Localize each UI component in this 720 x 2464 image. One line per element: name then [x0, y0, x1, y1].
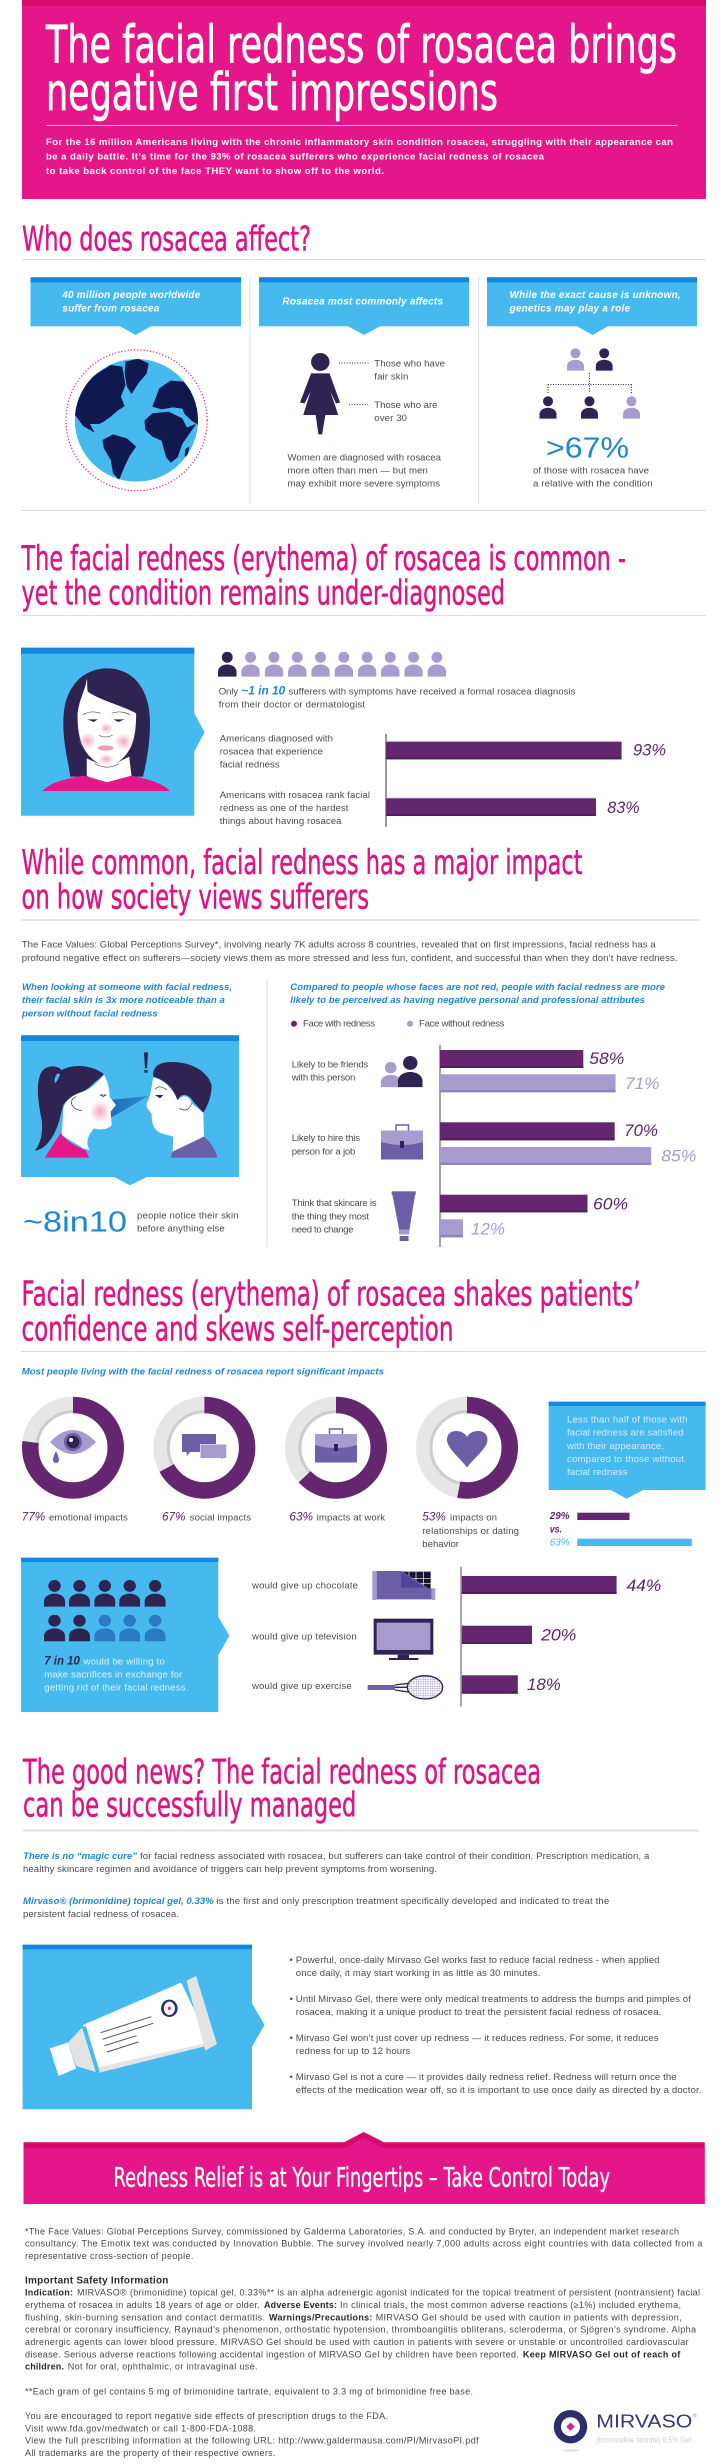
- group: hire: Likely to hire this: [292, 1133, 360, 1144]
- important safety information: Warnings/Precautions:: [269, 2312, 372, 2322]
- woman labels: Those who have: [374, 359, 445, 370]
- panel: 7 in 10: 7 in 10: [44, 1655, 80, 1667]
- text: 1 in 10 diagnosis: [219, 683, 576, 710]
- donut: 53% relationships: impacts on: [450, 1513, 497, 1524]
- bullet list: benefits: [290, 1955, 702, 2096]
- group: skincare: Think that skincare is: [292, 1198, 377, 1209]
- banner: call to action: [24, 2132, 705, 2204]
- important safety information: Keep MIRVASO Gel out of reach of: [523, 2349, 681, 2359]
- panel: genetics: of those with rosacea have: [533, 466, 649, 477]
- group: skincare: 12%: [471, 1221, 505, 1239]
- row: exercise: [251, 1675, 561, 1699]
- important safety information: MIRVASO Gel should be used with caution in patients with depression,: [376, 2312, 682, 2322]
- mini bars: 29% vs 63%: vs.: [550, 1524, 562, 1535]
- icon: television: [374, 1619, 433, 1660]
- footnote: survey: *The Face Values: Global Perceptions Survey, commissioned by Galderma Laboratories, S.A. and conducted by Bryter, an independent market research: [25, 2226, 679, 2236]
- row: exercise: would give up exercise: [251, 1681, 352, 1692]
- bullet list: benefits: effects of the medication wear off, so it is important to use once daily as directed by a doctor.: [296, 2085, 702, 2096]
- logo: Mirvaso: [554, 2410, 697, 2452]
- donut: 53% relationships: relationships or dating: [422, 1526, 519, 1537]
- important safety information: adrenergic agents can lower blood pressure. MIRVASO Gel should be used with caution in patients with severe or unstable or uncontrolled cardiovascular: [25, 2337, 689, 2347]
- heading: confidence: [21, 1275, 706, 1352]
- important safety information: erythema of rosacea in adults 18 years of age or older.: [25, 2300, 260, 2310]
- bullet list: benefits: redness for up to 12 hours: [296, 2046, 411, 2057]
- dotted leaders: [339, 363, 368, 405]
- icon: briefcase: [381, 1125, 423, 1160]
- row: chocolate: [251, 1571, 661, 1600]
- bullet list: benefits: •: [290, 2033, 293, 2044]
- main title: negative first impressions: [46, 63, 498, 123]
- text: no magic cure: for facial redness associated with rosacea, but sufferers can take control of their condition. Prescription medication, a: [140, 1851, 650, 1862]
- panel: genetics: genetics may play a role: [508, 303, 630, 314]
- panel: face illustration: [21, 648, 204, 816]
- important safety information: **Each gram of gel contains 5 mg of brimonidine tartrate, equivalent to 3.3 mg of brimonidine free base.: [25, 2386, 473, 2396]
- donut: 77% emotional: emotional impacts: [49, 1513, 128, 1524]
- woman labels: [288, 359, 445, 490]
- stat: 8 in 10: ~8in10: [23, 1207, 127, 1239]
- panel: satisfaction: Less than half of those with: [567, 1415, 688, 1426]
- heading: who does rosacea affect: Who does rosacea affect?: [22, 220, 311, 260]
- icon: tube: [392, 1191, 416, 1241]
- panel: 40 million worldwide: 40 million people worldwide: [61, 290, 201, 301]
- panel: 40 million worldwide: suffer from rosacea: [62, 303, 160, 314]
- important safety information: Not for oral, ophthalmic, or intravaginal use.: [68, 2362, 258, 2372]
- important safety information: flushing, skin-burning sensation and contact dermatitis.: [25, 2312, 265, 2322]
- bar: 83%: Americans with rosacea rank facial: [220, 790, 370, 801]
- bullet list: benefits: •: [290, 1994, 293, 2005]
- group: skincare: the thing they most: [292, 1211, 369, 1222]
- panel: satisfaction: with their appearance,: [566, 1441, 664, 1452]
- dotted ring: [66, 350, 207, 491]
- woman labels: over 30: [374, 413, 407, 424]
- icon: two people: [381, 1056, 422, 1087]
- text: negative attributes: [290, 982, 666, 1006]
- donut: 63% work: [289, 1405, 385, 1524]
- bar: 93%: 93%: [633, 742, 666, 760]
- heading: the good news: [22, 1752, 699, 1832]
- bar: 83%: things about having rosacea: [220, 816, 342, 827]
- icon: tearful eye: [50, 1430, 96, 1463]
- mini bars: 29% vs 63%: 29%: [549, 1511, 570, 1522]
- icon: woman figure: [300, 353, 340, 434]
- header banner: [22, 0, 706, 199]
- footer: reporting and links: [25, 2411, 479, 2458]
- important safety information: Indication:: [25, 2288, 73, 2298]
- panel: genetics: [487, 277, 697, 490]
- group: skincare: 60%: [593, 1195, 628, 1213]
- text: Mirvaso indication: is the first and only prescription treatment specifically developed and indicated to treat the: [216, 1896, 609, 1907]
- bullet list: benefits: Mirvaso Gel is not a cure — it provides daily redness relief. Redness will return once the: [296, 2072, 677, 2083]
- group: hire: 70%: [624, 1122, 658, 1140]
- panel: 40 million worldwide: [30, 277, 241, 491]
- row: chocolate: would give up chocolate: [251, 1580, 358, 1591]
- bar: 93%: rosacea that experience: [220, 747, 323, 758]
- text: survey description: The Face Values: Global Perceptions Survey*, involving nearly 7K adults across 8 countries, revealed that on first impressions, facial redness has a: [22, 940, 656, 951]
- important safety information: Important Safety Information: [25, 2275, 168, 2286]
- legend: Face with redness: [303, 1019, 375, 1030]
- bar: 83%: redness as one of the hardest: [220, 803, 349, 814]
- bar chart: sacrifices: [251, 1567, 661, 1707]
- panel: genetics: While the exact cause is unknown,: [510, 290, 681, 301]
- icon: briefcase: [315, 1429, 357, 1462]
- donut: 63% work: 63%: [289, 1512, 313, 1524]
- bar chart: diagnosed and hardest: [220, 734, 666, 827]
- text: survey description: [22, 940, 677, 964]
- stat: >67%: >67%: [546, 432, 629, 464]
- donut: 53% relationships: 53%: [422, 1512, 446, 1524]
- stat: 8 in 10: before anything else: [137, 1224, 225, 1235]
- bar: 93%: facial redness: [220, 760, 280, 771]
- donut: 67% social: 67%: [162, 1512, 186, 1524]
- icon: woman and man profiles: [35, 1052, 217, 1158]
- important safety information: cerebral or coronary insufficiency, Raynaud’s phenomenon, orthostatic hypotension, thromboangiitis obliterans, scleroderma, or Sjögren’s syndrome. Alpha: [25, 2325, 696, 2335]
- row: exercise: 18%: [527, 1676, 561, 1694]
- text: Mirvaso indication: persistent facial redness of rosacea.: [23, 1909, 179, 1920]
- icon: tennis racket: [368, 1676, 443, 1699]
- panel: 7 in 10: [21, 1558, 229, 1712]
- important safety information: [25, 2275, 700, 2396]
- row: television: [251, 1619, 576, 1660]
- heading: major impact: [21, 843, 700, 921]
- text: no magic cure: There is no “magic cure”: [23, 1851, 137, 1862]
- bullet list: benefits: Powerful, once-daily Mirvaso Gel works fast to reduce facial redness - when applied: [296, 1955, 660, 1966]
- icon: heart: [447, 1431, 488, 1468]
- icon: family tree: [540, 348, 640, 419]
- icon grid: people: [44, 1580, 166, 1641]
- subheading: significant impacts: Most people living with the facial redness of rosacea report significant impacts: [22, 1366, 384, 1377]
- footnote: survey: representative cross-section of people.: [25, 2251, 193, 2261]
- important safety information: children.: [25, 2362, 64, 2372]
- group: friends: 71%: [625, 1075, 660, 1093]
- footnote: survey: [25, 2226, 702, 2261]
- woman labels: more often than men — but men: [288, 466, 428, 477]
- group: friends: [291, 1050, 660, 1093]
- intro text: For the 16 million Americans living with the chronic inflammatory skin condition rosacea, struggling with their appearance can: [46, 137, 673, 148]
- heading: major impact: on how society views sufferers: [22, 878, 369, 918]
- icon row: 1 in 10 people: [218, 652, 446, 677]
- donut: 67% social: social impacts: [190, 1513, 251, 1524]
- bar: 83%: 83%: [607, 799, 640, 817]
- bullet list: benefits: Until Mirvaso Gel, there were only medical treatments to address the bumps and pimples of: [296, 1994, 691, 2005]
- panel: 7 in 10: make sacrifices in exchange for: [44, 1669, 183, 1680]
- important safety information: MIRVASO® (brimonidine) topical gel, 0.33%** is an alpha adrenergic agonist indicated for the topical treatment of persistent (nontransient) facial: [77, 2288, 700, 2298]
- icon: tube of gel: [50, 1976, 217, 2076]
- main title: [45, 16, 677, 123]
- logo: Mirvaso: MIRVASO: [596, 2411, 692, 2432]
- text: no magic cure: healthy skincare regimen and avoidance of triggers can help prevent symptoms from worsening.: [23, 1864, 437, 1875]
- woman labels: may exhibit more severe symptoms: [288, 479, 440, 490]
- intro text: be a daily battle. It’s time for the 93% of rosacea sufferers who experience facial redness of rosacea: [46, 152, 545, 162]
- group: friends: Likely to be friends: [292, 1059, 369, 1070]
- text: negative attributes: Compared to people whose faces are not red, people with facial redness are more: [290, 982, 666, 993]
- woman labels: Those who are: [374, 400, 438, 411]
- text: Mirvaso indication: [23, 1896, 609, 1920]
- row: chocolate: 44%: [627, 1577, 661, 1595]
- text: survey description: profound negative effect on sufferers—society views them as more stressed and less fun, confident, and successful than when they don’t have redness.: [22, 953, 677, 964]
- row: television: 20%: [540, 1626, 576, 1644]
- panel: satisfaction: compared to those without: [567, 1454, 684, 1465]
- text: 3x more noticeable: [21, 982, 232, 1019]
- bullet list: benefits: •: [290, 1955, 293, 1966]
- bar: 83%: [220, 790, 640, 827]
- icon: chocolate bar: [372, 1571, 435, 1600]
- panel: satisfaction: facial redness: [567, 1467, 628, 1478]
- text: 3x more noticeable: When looking at someone with facial redness,: [22, 982, 232, 993]
- logo: Mirvaso: ®: [693, 2412, 697, 2420]
- panel: most commonly affects: Rosacea most commonly affects: [282, 297, 443, 308]
- stat: 8 in 10: people notice their skin: [137, 1211, 239, 1222]
- panel: genetics: a relative with the condition: [533, 479, 653, 490]
- panel: satisfaction: facial redness are satisfied: [567, 1428, 684, 1439]
- footnote: survey: consultancy. The Emotix text was conducted by Innovation Bubble. The survey involved nearly 7,000 adults across eight countries with data collected from a: [25, 2239, 702, 2249]
- bullet list: benefits: •: [290, 2072, 293, 2083]
- footer: reporting and links: You are encouraged to report negative side effects of prescription drugs to the FDA.: [25, 2411, 388, 2421]
- panel: satisfaction: [549, 1402, 706, 1548]
- group: hire: person for a job: [292, 1146, 355, 1157]
- donut: 53% relationships: behavior: [422, 1539, 460, 1550]
- donut: 77% emotional: [22, 1405, 128, 1524]
- text: 1 in 10 diagnosis: ~1 in 10: [241, 683, 286, 697]
- mini bars: 29% vs 63%: [549, 1511, 692, 1548]
- text: negative attributes: likely to be perceived as having negative personal and professional attributes: [290, 995, 645, 1006]
- panel: most commonly affects: [259, 277, 469, 490]
- text: 1 in 10 diagnosis: from their doctor or dermatologist: [219, 699, 365, 710]
- legend: Face without redness: [419, 1019, 505, 1030]
- group: hire: [292, 1122, 696, 1166]
- bullet list: benefits: once daily, it may start working in as little as 30 minutes.: [296, 1968, 540, 1979]
- group: friends: 58%: [589, 1050, 624, 1068]
- bullet list: benefits: Mirvaso Gel won’t just cover up redness — it reduces redness. For some, it reduces: [296, 2033, 659, 2044]
- important safety information: In clinical trials, the most common adverse reactions (≥1%) included erythema,: [340, 2300, 681, 2310]
- intro text: [46, 137, 673, 177]
- bar: 93%: Americans diagnosed with: [220, 734, 333, 745]
- panel: 7 in 10: would be willing to: [82, 1656, 165, 1667]
- legend: [291, 1019, 505, 1030]
- donut: 63% work: impacts at work: [317, 1513, 385, 1524]
- donut: 67% social: [162, 1405, 251, 1524]
- text: 1 in 10 diagnosis: Only: [219, 686, 238, 697]
- stat: 8 in 10: [23, 1207, 239, 1239]
- group: skincare: [292, 1191, 628, 1241]
- text: 3x more noticeable: their facial skin is 3x more noticeable than a: [22, 995, 225, 1006]
- group: friends: with this person: [291, 1072, 355, 1083]
- panel: 7 in 10: getting rid of their facial redness.: [44, 1682, 188, 1693]
- woman labels: Women are diagnosed with rosacea: [288, 453, 442, 464]
- text: Mirvaso indication: Mirvaso® (brimonidine) topical gel, 0.33%: [23, 1896, 214, 1907]
- donut: 77% emotional: 77%: [22, 1512, 45, 1524]
- intro text: to take back control of the face THEY want to show off to the world.: [46, 166, 384, 177]
- group: hire: 85%: [661, 1148, 696, 1166]
- panel: gel tube: [23, 1945, 264, 2109]
- group: skincare: need to change: [292, 1224, 354, 1235]
- bullet list: benefits: rosacea, making it a unique product to treat the persistent facial redness of rosacea.: [296, 2007, 661, 2018]
- bar: 93%: [220, 734, 666, 771]
- footer: reporting and links: Visit www.fda.gov/medwatch or call 1-800-FDA-1088.: [25, 2423, 256, 2433]
- text: 3x more noticeable: person without facial redness: [21, 1008, 158, 1019]
- bar chart: perceptions: [291, 1045, 696, 1247]
- heading: confidence: confidence and skews self-perception: [22, 1310, 454, 1350]
- mini bars: 29% vs 63%: 63%: [550, 1537, 570, 1548]
- woman labels: fair skin: [374, 372, 408, 383]
- important safety information: disease. Serious adverse reactions following accidental ingestion of MIRVASO Gel by children have been reported.: [25, 2349, 519, 2359]
- icon: speech bubbles: [182, 1434, 226, 1460]
- footer: reporting and links: All trademarks are the property of their respective owners.: [25, 2448, 276, 2458]
- donut: 53% relationships: [422, 1405, 519, 1550]
- icon: globe: [74, 359, 201, 482]
- logo: Mirvaso: (brimonidine tartrate) 0.5% Gel: [596, 2435, 691, 2444]
- row: television: would give up television: [251, 1632, 357, 1643]
- panel: two profiles illustration: [21, 1035, 239, 1185]
- text: no magic cure: [23, 1851, 650, 1875]
- footer: reporting and links: View the full prescribing information at the following URL: http://www.galdermausa.com/PI/MirvasoPI.pdf: [25, 2436, 479, 2446]
- icon: woman face: [42, 668, 170, 791]
- important safety information: Adverse Events:: [264, 2300, 337, 2310]
- heading: the good news: can be successfully managed: [23, 1786, 356, 1826]
- heading: common yet under-diagnosed: [21, 539, 706, 616]
- text: 1 in 10 diagnosis: sufferers with symptoms have received a formal rosacea diagnosis: [288, 686, 576, 697]
